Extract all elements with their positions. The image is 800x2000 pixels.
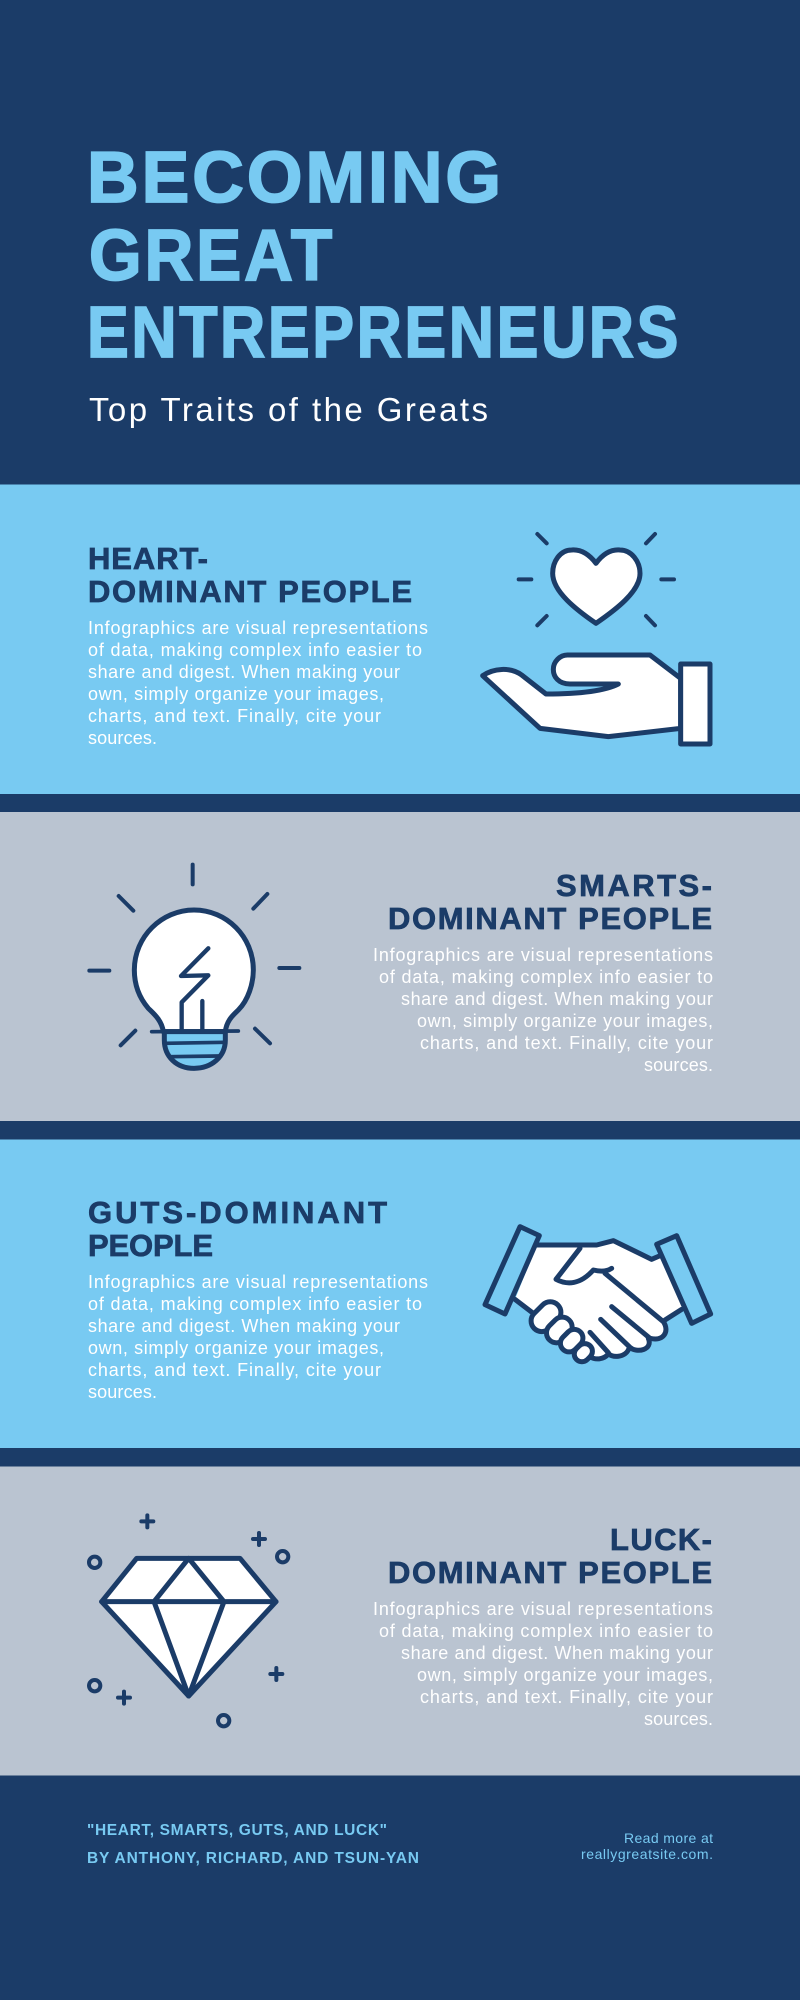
text block: guts: sources.: [88, 1382, 157, 1402]
heading: smarts: [388, 868, 712, 936]
text block: luck: [373, 1599, 713, 1729]
text block: luck: of data, making complex info easier to: [379, 1621, 713, 1641]
heading: guts: PEOPLE: [88, 1228, 213, 1263]
footer: [87, 1822, 713, 1867]
text block: smarts: share and digest. When making your: [401, 989, 713, 1009]
heading: heart: [88, 541, 412, 609]
panel: guts-dominant people: [0, 1140, 800, 1448]
text block: heart: of data, making complex info easier to: [88, 640, 422, 660]
icon: diamond: [89, 1515, 288, 1726]
title: ENTREPRENEURS: [87, 293, 681, 373]
text block: luck: sources.: [644, 1709, 713, 1729]
text block: smarts: [373, 945, 713, 1075]
heading: smarts: SMARTS-: [556, 868, 712, 903]
footer link: reallygreatsite.com.: [581, 1846, 713, 1862]
text block: guts: charts, and text. Finally, cite your: [88, 1360, 381, 1380]
heading: luck: DOMINANT PEOPLE: [388, 1555, 712, 1590]
text block: luck: Infographics are visual representations: [373, 1599, 713, 1619]
heading: heart: HEART-: [88, 541, 208, 576]
panel: smarts-dominant people: [0, 812, 800, 1121]
title: BECOMING: [87, 138, 504, 218]
subtitle: Top Traits of the Greats: [89, 391, 488, 428]
text block: heart: share and digest. When making your: [88, 662, 400, 682]
text block: heart: Infographics are visual representations: [88, 618, 428, 638]
text block: heart: [88, 618, 428, 748]
text block: luck: share and digest. When making your: [401, 1643, 713, 1663]
text block: guts: [88, 1272, 428, 1402]
text block: smarts: Infographics are visual representations: [373, 945, 713, 965]
heading: guts: [88, 1195, 387, 1263]
text block: smarts: sources.: [644, 1055, 713, 1075]
heading: smarts: DOMINANT PEOPLE: [388, 901, 712, 936]
footer source credit: BY ANTHONY, RICHARD, AND TSUN-YAN: [87, 1850, 419, 1867]
text block: heart: charts, and text. Finally, cite your: [88, 706, 381, 726]
text block: smarts: own, simply organize your images,: [417, 1011, 713, 1031]
footer source credit: [87, 1822, 419, 1867]
title: GREAT: [89, 216, 335, 296]
footer link: [581, 1830, 713, 1862]
text block: luck: charts, and text. Finally, cite your: [420, 1687, 713, 1707]
text block: heart: own, simply organize your images,: [88, 684, 384, 704]
text block: guts: own, simply organize your images,: [88, 1338, 384, 1358]
text block: guts: share and digest. When making your: [88, 1316, 400, 1336]
icon: handshake: [485, 1227, 711, 1365]
text block: smarts: of data, making complex info easier to: [379, 967, 713, 987]
text block: heart: sources.: [88, 728, 157, 748]
panel: luck-dominant people: [0, 1466, 800, 1776]
header panel: [87, 138, 681, 428]
text block: guts: of data, making complex info easier to: [88, 1294, 422, 1314]
heading: luck: [388, 1522, 712, 1590]
icon: heart in hand: [483, 534, 710, 744]
footer source credit: "HEART, SMARTS, GUTS, AND LUCK": [87, 1822, 387, 1839]
text block: guts: Infographics are visual representations: [88, 1272, 428, 1292]
icon: light bulb: [89, 865, 299, 1068]
panel: heart-dominant people: [0, 484, 800, 794]
heading: heart: DOMINANT PEOPLE: [88, 574, 412, 609]
text block: smarts: charts, and text. Finally, cite your: [420, 1033, 713, 1053]
heading: guts: GUTS-DOMINANT: [88, 1195, 387, 1230]
footer link: Read more at: [624, 1830, 713, 1846]
text block: luck: own, simply organize your images,: [417, 1665, 713, 1685]
heading: luck: LUCK-: [610, 1522, 712, 1557]
title: [87, 138, 681, 373]
